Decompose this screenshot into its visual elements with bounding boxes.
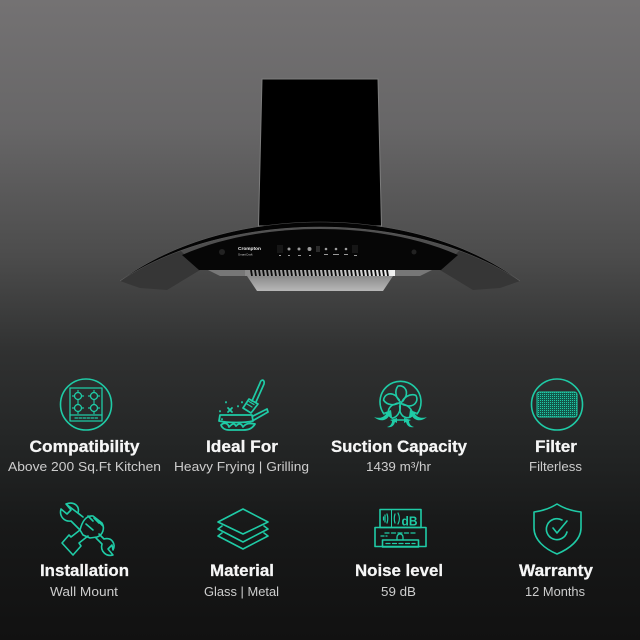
heading: Compatibility xyxy=(30,438,140,456)
grille xyxy=(245,270,395,276)
brand: SmartCraft xyxy=(238,252,253,256)
chimney xyxy=(258,79,382,226)
fan ring and blades xyxy=(380,381,421,420)
heading: Noise level xyxy=(355,562,443,580)
heading: Ideal For xyxy=(206,438,279,456)
airflow arrows xyxy=(374,410,427,427)
item: warranty xyxy=(519,504,594,599)
item: compatibility xyxy=(8,379,161,474)
item: ideal for xyxy=(174,380,309,474)
icon: hand with wrench xyxy=(61,503,114,555)
detail: 59 dB xyxy=(381,585,416,599)
icon: fan with airflow xyxy=(374,381,427,427)
item: installation xyxy=(40,503,129,599)
item: material xyxy=(204,509,279,599)
chimney hood product xyxy=(120,79,520,291)
left glass wing xyxy=(120,251,200,290)
icon: stacked layers xyxy=(218,509,268,549)
steel underside xyxy=(247,276,393,291)
detail: Wall Mount xyxy=(50,585,119,599)
heading: Filter xyxy=(535,438,578,456)
item: filter xyxy=(529,379,582,474)
detail: 12 Months xyxy=(525,585,585,599)
heading: Warranty xyxy=(519,562,594,580)
right glass wing xyxy=(440,251,520,290)
icon: noise meter xyxy=(375,510,426,547)
heading: Material xyxy=(210,562,274,580)
control panel xyxy=(182,229,458,270)
icon: gas hob xyxy=(60,379,112,430)
detail: Glass | Metal xyxy=(204,585,279,599)
dB label: dB xyxy=(402,514,418,528)
icon: pan and spatula xyxy=(219,380,268,430)
icon: mesh filter xyxy=(532,379,582,430)
touch controls xyxy=(219,245,416,256)
detail: 1439 m³/hr xyxy=(366,460,431,474)
item: noise level xyxy=(355,510,443,599)
brand: Crompton xyxy=(238,246,261,252)
heading: Suction Capacity xyxy=(331,438,468,456)
heading: Installation xyxy=(40,562,129,580)
brand xyxy=(238,246,261,256)
detail: Above 200 Sq.Ft Kitchen xyxy=(8,460,161,474)
detail: Heavy Frying | Grilling xyxy=(174,460,309,474)
icon: shield with check xyxy=(534,504,581,554)
curved canopy edge xyxy=(120,222,520,281)
detail: Filterless xyxy=(529,460,582,474)
item: suction capacity xyxy=(331,381,468,474)
panel side rails xyxy=(208,270,432,276)
